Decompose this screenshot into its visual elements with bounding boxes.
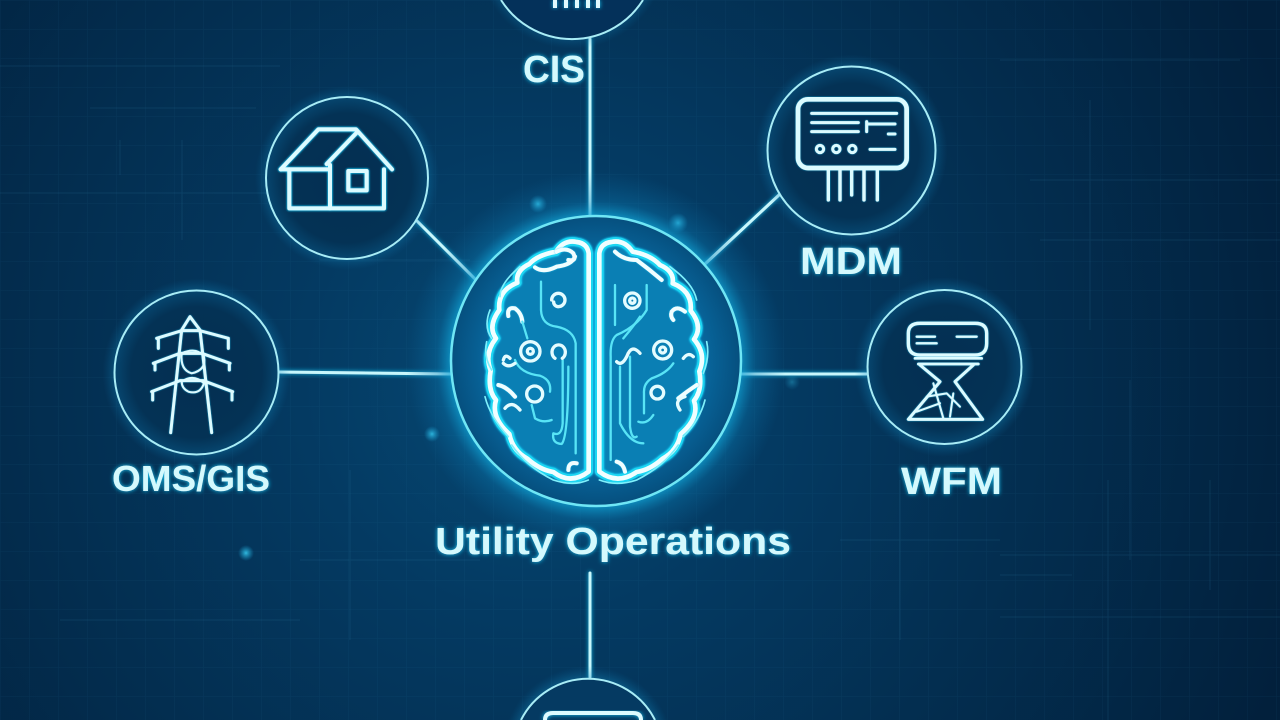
node: OMS/GIS bbox=[102, 278, 290, 499]
node: WFM bbox=[854, 277, 1034, 503]
node: home bbox=[255, 86, 439, 270]
label: CIS: CIS bbox=[523, 49, 585, 91]
node: CIS bbox=[490, 0, 654, 91]
glowing particles bbox=[238, 195, 800, 561]
icon: CIS meter legs bbox=[555, 0, 598, 8]
label: MDM: MDM bbox=[800, 241, 902, 283]
connector lines bbox=[279, 39, 867, 677]
heading: Utility Operations: Utility Operations bbox=[435, 521, 791, 563]
icon: bottom device top edge bbox=[545, 713, 641, 720]
node: MDM bbox=[756, 54, 948, 283]
icon: brain bbox=[485, 242, 708, 483]
label: OMS/GIS: OMS/GIS bbox=[112, 458, 270, 499]
label: WFM: WFM bbox=[901, 461, 1002, 503]
central hub: brain bbox=[406, 171, 786, 551]
node: bottom bbox=[508, 666, 668, 720]
icon: transmission tower bbox=[152, 317, 233, 433]
icon: meter panel bbox=[798, 99, 907, 200]
icon: hourglass with map bbox=[908, 323, 987, 419]
icon: house bbox=[281, 129, 392, 208]
